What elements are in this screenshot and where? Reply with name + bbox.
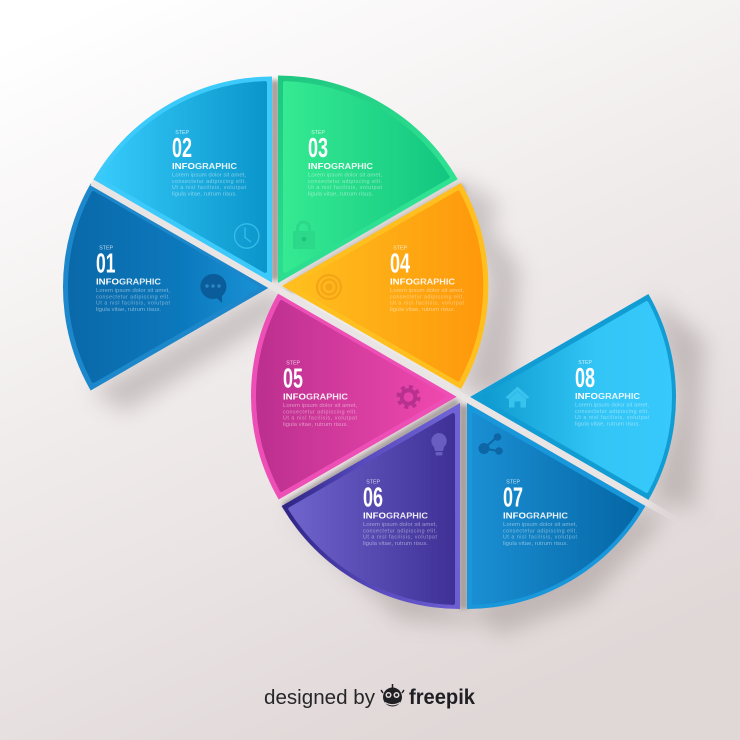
step text: GRAPHIC (526, 510, 568, 520)
step text: Ut a nisl facilisis, volutpat (390, 300, 465, 306)
step text: ligula vitae, rutrum risus. (172, 191, 237, 197)
segment fill (102, 83, 265, 271)
segment fill (484, 303, 670, 491)
step text: STEP (286, 361, 300, 367)
step text: STEP (99, 246, 113, 252)
icon: target (317, 275, 341, 299)
step text: INFO (308, 161, 331, 171)
step text: consectetur adipiscing elit. (172, 179, 246, 185)
step text: ligula vitae, rutrum risus. (363, 541, 428, 547)
step text: Ut a nisl facilisis, volutpat (308, 185, 383, 191)
step text: INFO (283, 392, 306, 402)
icon: chat bubble (200, 274, 226, 303)
step text: GRAPHIC (195, 161, 237, 171)
step text: INFO (575, 391, 598, 401)
icon: light bulb (431, 433, 447, 456)
step text: consectetur adipiscing elit. (575, 409, 649, 415)
icon: share nodes (480, 434, 502, 454)
step text (96, 246, 171, 313)
step text: GRAPHIC (386, 510, 428, 520)
step text: Ut a nisl facilisis, volutpat (283, 416, 358, 422)
icon: house (506, 386, 530, 408)
step text: GRAPHIC (331, 161, 373, 171)
step text (172, 130, 247, 197)
step text (390, 246, 465, 313)
step text (503, 480, 578, 547)
long soft shadows (91, 179, 705, 635)
icon: gear (398, 387, 419, 407)
panel: step 05 (251, 292, 458, 500)
step text: Lorem ipsum dolor sit amet, (96, 288, 170, 294)
step text: 02 (172, 132, 192, 163)
segment border (282, 403, 460, 609)
step text (308, 130, 383, 197)
segment fill (296, 193, 481, 379)
step text: GRAPHIC (598, 391, 640, 401)
segment fill (70, 193, 256, 381)
step text: GRAPHIC (413, 276, 455, 286)
step text: GRAPHIC (306, 392, 348, 402)
step text: Lorem ipsum dolor sit amet, (575, 403, 649, 409)
panel: step 04 (282, 183, 488, 389)
step text: Ut a nisl facilisis, volutpat (172, 185, 247, 191)
step text: Ut a nisl facilisis, volutpat (503, 534, 578, 540)
step text: consectetur adipiscing elit. (96, 294, 170, 300)
step text: INFO (503, 510, 526, 520)
step text: Lorem ipsum dolor sit amet, (390, 288, 464, 294)
step text: STEP (506, 480, 520, 486)
segment border (470, 294, 676, 500)
segment fill (258, 302, 444, 490)
segment fill (290, 415, 453, 603)
segment border (251, 292, 458, 500)
step text: Ut a nisl facilisis, volutpat (575, 415, 650, 421)
step text: consectetur adipiscing elit. (283, 409, 357, 415)
brand name: freepik (409, 686, 475, 709)
step text: consectetur adipiscing elit. (363, 528, 437, 534)
step text: 01 (96, 248, 116, 278)
step text: consectetur adipiscing elit. (503, 528, 577, 534)
step text: Lorem ipsum dolor sit amet, (363, 522, 437, 528)
icon: bee mascot (381, 684, 404, 706)
step text: ligula vitae, rutrum risus. (390, 307, 455, 313)
segment fill (474, 415, 637, 603)
segment fill (285, 83, 448, 271)
icon: padlock (293, 221, 315, 249)
segment border (278, 76, 458, 283)
step text: GRAPHIC (119, 276, 161, 286)
panel: step 01 (63, 184, 270, 390)
step text (575, 360, 650, 427)
step text: INFO (390, 276, 413, 286)
credit text: designed by (264, 687, 375, 709)
segment border (282, 183, 488, 389)
panel: step 03 (278, 76, 458, 283)
step text: INFO (363, 510, 386, 520)
diagonal divider band (92, 182, 682, 523)
step text: 08 (575, 362, 595, 393)
step text: Ut a nisl facilisis, volutpat (96, 300, 171, 306)
segment border (467, 403, 645, 609)
panel: step 02 (93, 76, 272, 283)
step text: 03 (308, 132, 328, 163)
step text: consectetur adipiscing elit. (390, 294, 464, 300)
footer logo: designed by freepik (264, 684, 475, 709)
step text: Lorem ipsum dolor sit amet, (503, 522, 577, 528)
step text: Ut a nisl facilisis, volutpat (363, 534, 438, 540)
step text: STEP (393, 246, 407, 252)
step text: STEP (366, 480, 380, 486)
step text: INFO (172, 161, 195, 171)
step text: ligula vitae, rutrum risus. (96, 307, 161, 313)
icon: clock (234, 224, 259, 248)
panel: step 08 (470, 294, 676, 500)
step text: STEP (311, 130, 325, 136)
step text: ligula vitae, rutrum risus. (283, 422, 348, 428)
step text: 05 (283, 362, 303, 394)
step text: Lorem ipsum dolor sit amet, (283, 403, 357, 409)
step text: STEP (175, 130, 189, 136)
step text: ligula vitae, rutrum risus. (308, 191, 373, 197)
step text: ligula vitae, rutrum risus. (503, 541, 568, 547)
step text (283, 361, 358, 428)
step text: Lorem ipsum dolor sit amet, (172, 173, 246, 179)
gap shadows between segments (270, 80, 469, 609)
panel: step 07 (467, 403, 645, 609)
step text (363, 480, 438, 547)
step text: INFO (96, 276, 119, 286)
step text: 04 (390, 248, 410, 278)
step text: 06 (363, 482, 383, 512)
step text: ligula vitae, rutrum risus. (575, 421, 640, 427)
step text: 07 (503, 482, 523, 512)
step text: Lorem ipsum dolor sit amet, (308, 173, 382, 179)
step text: STEP (578, 360, 592, 366)
segment border (63, 184, 270, 390)
step text: consectetur adipiscing elit. (308, 179, 382, 185)
segment border (93, 76, 272, 283)
panel: step 06 (282, 403, 460, 609)
